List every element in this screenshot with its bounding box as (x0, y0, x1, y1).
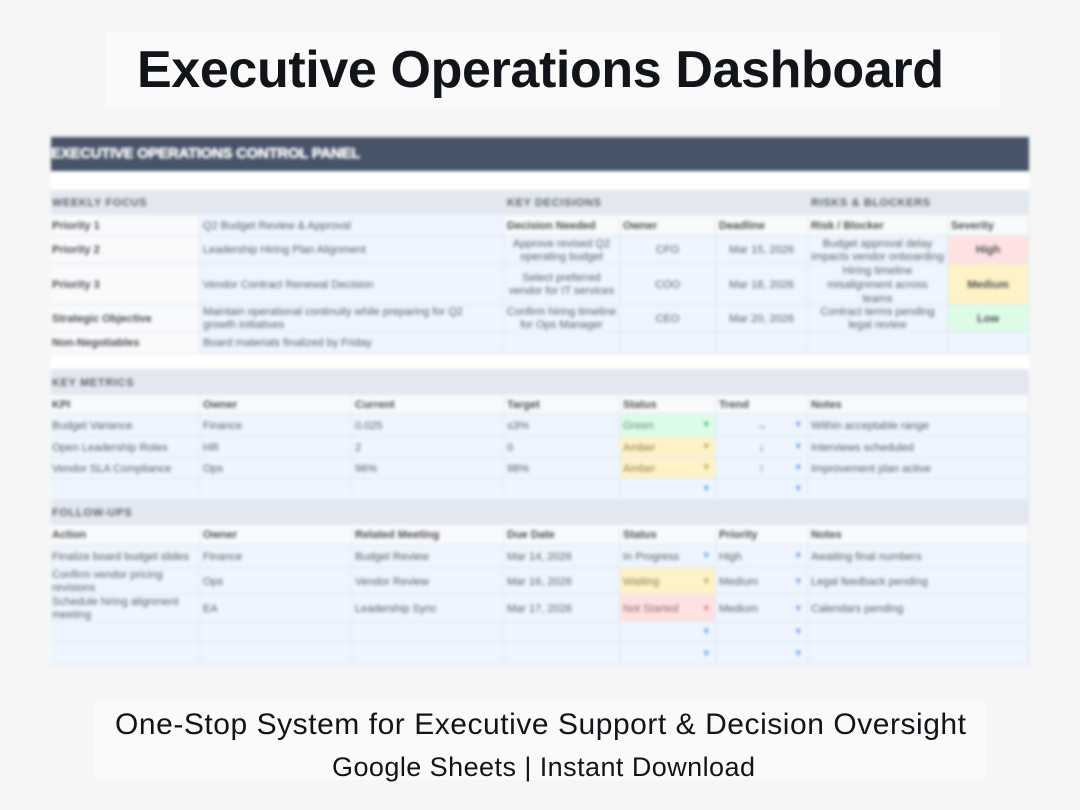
panel: key metrics: HR (203, 442, 219, 454)
panel: follow-ups: meeting (52, 609, 91, 621)
panel: weekly focus, key decisions, risks and blockers: Non-Negotiables (52, 337, 139, 349)
panel: weekly focus, key decisions, risks and blockers: COO (655, 278, 680, 290)
panel: follow-ups: Schedule hiring alignment (52, 596, 179, 608)
panel: weekly focus, key decisions, risks and blockers: Priority 3 (52, 278, 100, 290)
panel: follow-ups: Action (52, 529, 86, 541)
panel: follow-ups: Finalize board budget slides (52, 550, 189, 562)
panel: weekly focus, key decisions, risks and blockers: vendor for IT services (509, 285, 614, 297)
panel: follow-ups: Mar 16, 2026 (507, 576, 572, 588)
panel: key metrics: 0.025 (355, 420, 383, 432)
panel: weekly focus, key decisions, risks and blockers: Risk / Blocker (811, 220, 884, 232)
panel: key metrics (50, 368, 1030, 501)
panel: follow-ups: Vendor Review (355, 576, 429, 588)
panel: weekly focus, key decisions, risks and blockers: Select preferred (522, 272, 601, 284)
subtitle card: One-Stop System for Executive Support & Decision Oversight (115, 708, 967, 741)
panel: key metrics: 98% (507, 462, 529, 474)
panel: weekly focus, key decisions, risks and blockers: High (976, 244, 1000, 256)
panel: weekly focus, key decisions, risks and blockers: Confirm hiring timeline (507, 306, 616, 318)
panel: weekly focus, key decisions, risks and blockers: teams (862, 293, 892, 305)
panel: weekly focus, key decisions, risks and blockers: WEEKLY FOCUS (52, 197, 147, 209)
panel: weekly focus, key decisions, risks and blockers: Deadline (719, 220, 765, 232)
panel: follow-ups: Leadership Sync (355, 602, 437, 614)
panel: key metrics: ↑ (759, 462, 764, 474)
sheet title bar: EXECUTIVE OPERATIONS CONTROL PANEL (51, 145, 360, 162)
panel: key metrics: ≤3% (507, 420, 529, 432)
panel: follow-ups: Medium (719, 576, 758, 588)
panel: key metrics: KPI (52, 398, 70, 410)
panel: weekly focus, key decisions, risks and blockers: operating budget (520, 250, 603, 262)
panel: key metrics: Amber (623, 442, 655, 454)
panel: weekly focus, key decisions, risks and blockers: Contract terms pending (820, 306, 935, 318)
panel: blurred spreadsheet (51, 137, 1029, 665)
panel: weekly focus, key decisions, risks and blockers: Mar 20, 2026 (729, 312, 794, 324)
panel: weekly focus, key decisions, risks and blockers: misalignment across (827, 279, 928, 291)
panel: follow-ups: Related Meeting (355, 529, 439, 541)
panel: follow-ups: Budget Review (355, 550, 429, 562)
panel: follow-ups: Owner (203, 529, 237, 541)
panel: follow-ups: Mar 14, 2026 (507, 550, 572, 562)
panel: follow-ups: Priority (719, 529, 758, 541)
panel: key metrics: 96% (355, 462, 377, 474)
panel: key metrics: → (756, 420, 767, 432)
panel: key metrics: Budget Variance (52, 420, 133, 432)
panel: key metrics: Owner (203, 398, 237, 410)
panel: follow-ups: Not Started (623, 602, 679, 614)
panel: follow-ups: EA (203, 602, 218, 614)
panel: weekly focus, key decisions, risks and blockers (50, 189, 1030, 355)
panel: weekly focus, key decisions, risks and blockers: Board materials finalized by Friday (203, 337, 372, 349)
panel: weekly focus, key decisions, risks and blockers: CEO (656, 312, 679, 324)
panel: weekly focus, key decisions, risks and blockers: Budget approval delay (823, 238, 932, 250)
panel: follow-ups: Status (623, 529, 657, 541)
panel: weekly focus, key decisions, risks and blockers: Q2 Budget Review & Approval (203, 220, 351, 232)
panel: key metrics: Finance (203, 420, 242, 432)
panel: follow-ups: Finance (203, 550, 242, 562)
panel: key metrics: Interviews scheduled (811, 442, 914, 454)
panel: weekly focus, key decisions, risks and blockers: Mar 18, 2026 (729, 278, 794, 290)
panel: key metrics: Open Leadership Roles (52, 442, 168, 454)
panel: key metrics: Status (623, 398, 657, 410)
panel: follow-ups: Confirm vendor pricing (52, 569, 163, 581)
panel: follow-ups: Waiting (623, 576, 659, 588)
panel: key metrics: Current (355, 398, 395, 410)
panel: key metrics: Notes (811, 398, 842, 410)
panel: follow-ups: Awaiting final numbers (811, 550, 921, 562)
panel: weekly focus, key decisions, risks and blockers: Decision Needed (507, 220, 596, 232)
panel: weekly focus, key decisions, risks and blockers: Approve revised Q2 (513, 238, 610, 250)
panel: follow-ups (50, 499, 1030, 666)
panel: follow-ups: Ops (203, 576, 223, 588)
title: Executive Operations Dashboard (137, 41, 944, 99)
panel: follow-ups: In Progress (623, 550, 679, 562)
subtitle card (94, 700, 986, 780)
panel: follow-ups: Legal feedback pending (811, 576, 928, 588)
panel: key metrics: Within acceptable range (811, 420, 929, 432)
panel: follow-ups: Mar 17, 2026 (507, 602, 572, 614)
panel: weekly focus, key decisions, risks and blockers: Strategic Objective (52, 312, 152, 324)
panel: weekly focus, key decisions, risks and blockers: Owner (623, 220, 657, 232)
panel: weekly focus, key decisions, risks and blockers: RISKS & BLOCKERS (811, 197, 931, 209)
panel: follow-ups: High (719, 550, 742, 562)
panel: weekly focus, key decisions, risks and blockers: Maintain operational continuity while preparing for Q2 (203, 306, 463, 318)
panel: weekly focus, key decisions, risks and blockers: growth initiatives (203, 319, 284, 331)
panel: weekly focus, key decisions, risks and blockers: Low (977, 312, 999, 324)
panel: weekly focus, key decisions, risks and blockers: KEY DECISIONS (507, 197, 601, 209)
panel: weekly focus, key decisions, risks and blockers: Leadership Hiring Plan Alignment (203, 244, 366, 256)
panel: weekly focus, key decisions, risks and blockers: Medium (967, 278, 1009, 290)
panel: key metrics: Target (507, 398, 540, 410)
panel: weekly focus, key decisions, risks and blockers: Hiring timeline (843, 265, 912, 277)
panel: key metrics: Improvement plan active (811, 462, 931, 474)
panel: key metrics: KEY METRICS (52, 376, 134, 388)
panel: key metrics: Amber (623, 462, 655, 474)
panel: key metrics: 2 (355, 442, 361, 454)
panel: key metrics: Vendor SLA Compliance (52, 462, 171, 474)
panel: weekly focus, key decisions, risks and blockers: Mar 15, 2026 (729, 244, 794, 256)
sheet title bar (51, 137, 1029, 171)
panel: follow-ups: Medium (719, 602, 758, 614)
panel: weekly focus, key decisions, risks and blockers: for Ops Manager (520, 319, 603, 331)
panel: key metrics: Ops (203, 462, 223, 474)
panel: weekly focus, key decisions, risks and blockers: Vendor Contract Renewal Decision (203, 278, 374, 290)
panel: follow-ups: revisions (52, 582, 95, 594)
panel: follow-ups: Notes (811, 529, 842, 541)
panel: key metrics: Green (623, 420, 654, 432)
panel: key metrics: ↓ (759, 442, 764, 454)
panel: key metrics: 0 (507, 442, 513, 454)
subtitle card: Google Sheets | Instant Download (332, 752, 755, 782)
panel: key metrics: Trend (719, 398, 749, 410)
title (106, 32, 1000, 108)
panel: follow-ups: FOLLOW-UPS (52, 507, 132, 519)
panel: weekly focus, key decisions, risks and blockers: impacts vendor onboarding (811, 250, 944, 262)
panel: weekly focus, key decisions, risks and blockers: Priority 1 (52, 220, 100, 232)
panel: weekly focus, key decisions, risks and blockers: CFO (656, 244, 679, 256)
panel: follow-ups: Calendars pending (811, 602, 903, 614)
panel: follow-ups: Due Date (507, 529, 555, 541)
panel: weekly focus, key decisions, risks and blockers: legal review (848, 319, 907, 331)
panel: weekly focus, key decisions, risks and blockers: Priority 2 (52, 244, 100, 256)
panel: weekly focus, key decisions, risks and blockers: Severity (951, 220, 994, 232)
